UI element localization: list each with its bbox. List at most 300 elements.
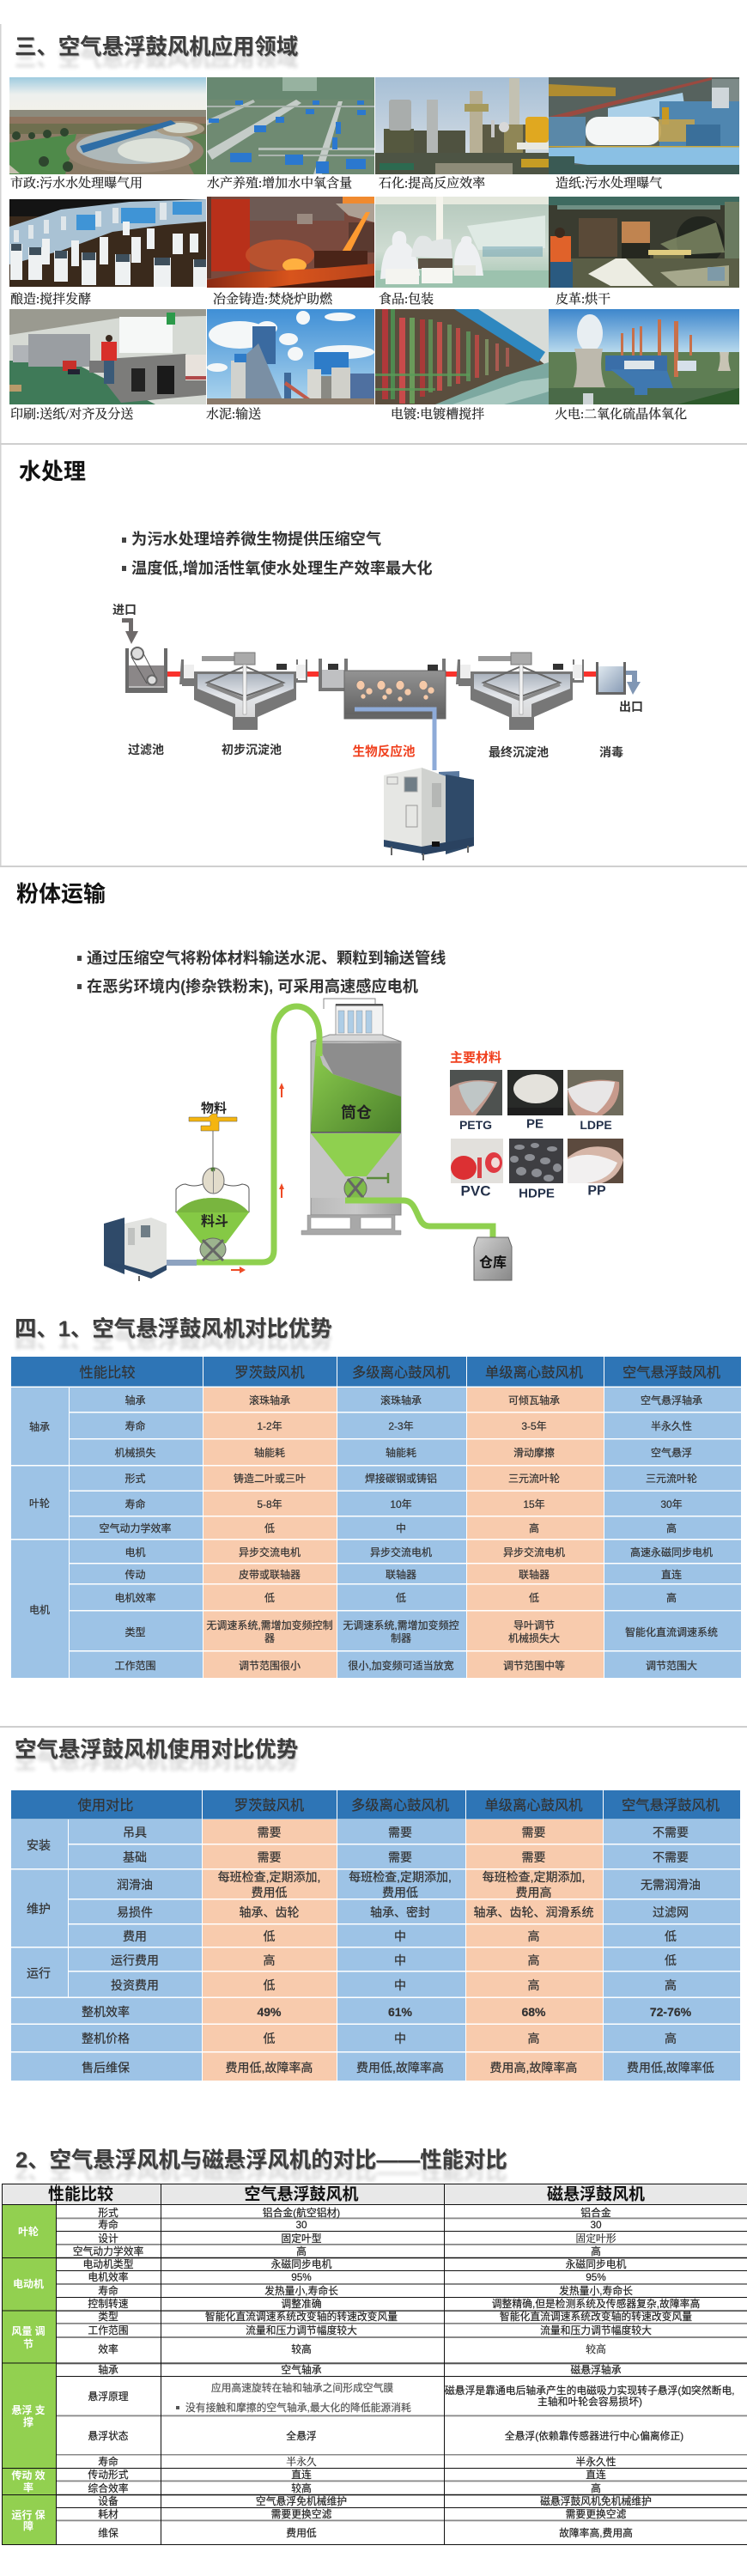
group labels — [29, 1420, 50, 1616]
rows: bearing: 轴能耗 — [254, 1446, 285, 1459]
rows: operation — [98, 2495, 652, 2539]
conveying diagram — [104, 999, 623, 1281]
rows: levitation support: 悬浮状态 — [88, 2430, 129, 2442]
table header: 单级离心鼓风机 — [485, 1798, 582, 1814]
rows: maintenance: 费用高 — [515, 1886, 551, 1899]
rows: impeller — [99, 1472, 697, 1534]
table backgrounds — [11, 1357, 741, 1678]
rows: motor: 调整精确,但是检测系统及传感器复杂,故障率高 — [492, 2298, 700, 2310]
rows: levitation support: 半永久性 — [575, 2456, 616, 2468]
rows: transmission: 传动形式 — [88, 2469, 129, 2481]
rows: operation: 高 — [263, 1953, 275, 1967]
rows: bearing: 1-2年 — [257, 1420, 282, 1432]
photo: electroplating — [375, 309, 549, 404]
rows: impeller: 中 — [396, 1522, 406, 1534]
rows: installation: 需要 — [388, 1850, 412, 1864]
rows: bearing: 寿命 — [125, 1419, 146, 1432]
text block: water treatment bullets: 温度低,增加活性氧使水处理生产效率最大化 — [131, 559, 433, 577]
rows: overall: 72-76% — [650, 2005, 692, 2019]
title: air vs magnetic: 2、空气悬浮风机与磁悬浮风机的对比——性能对比 — [15, 2148, 507, 2172]
rows: motor: 调节范围大 — [646, 1660, 697, 1672]
rows: impeller: 30 — [590, 2219, 602, 2231]
rows: levitation support — [88, 2364, 735, 2468]
rows: motor: 电机效率 — [88, 2271, 129, 2283]
text block: powder bullets: 通过压缩空气将粉体材料输送水泥、颗粒到输送管线 — [87, 949, 446, 967]
group labels: 撑 — [23, 2415, 33, 2428]
rows: operation: 故障率高,费用高 — [559, 2527, 633, 2539]
rows: levitation support: 主轴和叶轮会容易损坏) — [537, 2396, 642, 2408]
rows: bearing — [114, 1394, 702, 1459]
rows: installation: 需要 — [522, 1850, 546, 1864]
material: LDPE: LDPE — [580, 1118, 612, 1132]
rows: motor: 异步交流电机 — [239, 1546, 301, 1558]
silo — [301, 1035, 401, 1235]
rows: motor: 发热量小,寿命长 — [264, 2285, 338, 2297]
dust filter — [324, 999, 383, 1035]
rows: installation: 不需要 — [653, 1826, 689, 1839]
rows: motor: 低 — [264, 1592, 275, 1604]
labels: stages: 初步沉淀池 — [222, 743, 282, 756]
panel: air vs magnetic levitation table — [2, 2148, 747, 2545]
rows: maintenance — [117, 1870, 701, 1943]
rows: bearing: 滑动摩擦 — [513, 1446, 555, 1459]
rows: motor: 电机 — [125, 1546, 146, 1558]
group labels: 率 — [23, 2481, 33, 2494]
rows: air flow regulation: 智能化直流调速系统改变轴的转速改变风量 — [205, 2311, 398, 2323]
rows: impeller: 设计 — [98, 2233, 118, 2245]
rows: levitation support: 全悬浮(依赖靠传感器进行中心偏离修正) — [505, 2430, 683, 2442]
rows: air flow regulation: 流量和压力调节幅度较大 — [246, 2324, 357, 2336]
group labels: 叶轮 — [18, 2225, 39, 2238]
blower machine — [384, 768, 474, 860]
rows: air flow regulation: 较高 — [586, 2343, 606, 2355]
rows: air flow regulation: 流量和压力调节幅度较大 — [540, 2324, 652, 2336]
photo: thermal power — [549, 309, 739, 404]
rows: motor: 异步交流电机 — [503, 1546, 565, 1558]
rows: impeller: 高 — [296, 2245, 307, 2257]
rows: bearing: 空气悬浮 — [651, 1446, 692, 1459]
rows: overall: 整机价格 — [82, 2032, 130, 2045]
caption: municipal: 市政:污水水处理曝气用 — [10, 176, 143, 191]
material: HDPE — [509, 1139, 563, 1200]
rows: installation: 不需要 — [653, 1850, 689, 1864]
rows: bearing: 机械损失 — [114, 1446, 156, 1459]
group labels: 叶轮 — [29, 1498, 50, 1510]
material: LDPE — [568, 1070, 623, 1132]
rows: overall: 费用低,故障率低 — [627, 2061, 714, 2075]
rows: operation: 低 — [263, 1978, 275, 1992]
rows: motor — [82, 2258, 700, 2310]
rows: maintenance: 无需润滑油 — [641, 1878, 701, 1892]
tank: disinfection — [596, 662, 626, 695]
rows: motor: 高 — [666, 1591, 677, 1604]
table header: 空气悬浮鼓风机 — [622, 1798, 720, 1814]
rows: bearing: 滚珠轴承 — [380, 1394, 422, 1406]
rows: maintenance: 轴承、齿轮 — [239, 1905, 299, 1919]
rows: installation: 需要 — [388, 1826, 412, 1839]
caption: petrochemical: 石化:提高反应效率 — [379, 175, 485, 191]
arrow: outlet — [626, 671, 641, 695]
rows: maintenance: 易损件 — [117, 1905, 153, 1919]
rows: maintenance: 每班检查,定期添加, — [349, 1870, 452, 1884]
rows: installation: 需要 — [258, 1826, 282, 1839]
table header — [79, 1365, 720, 1381]
labels: stages: 最终沉淀池 — [489, 745, 549, 759]
rows: impeller: 30年 — [660, 1498, 683, 1510]
labels: stages: 生物反应池 — [353, 744, 416, 759]
rows: maintenance: 每班检查,定期添加, — [218, 1870, 320, 1884]
rows: installation: 基础 — [123, 1850, 147, 1864]
table header: 多级离心鼓风机 — [351, 1798, 449, 1814]
material: PP: PP — [587, 1183, 606, 1199]
table header: 罗茨鼓风机 — [234, 1365, 305, 1381]
hopper: 料斗 — [201, 1214, 228, 1230]
rows: motor — [114, 1546, 718, 1672]
rows: bearing: 2-3年 — [388, 1420, 414, 1432]
rows: operation: 需要更换空滤 — [566, 2508, 627, 2520]
rows: operation: 空气悬浮免机械维护 — [256, 2495, 347, 2507]
blower machine — [104, 1218, 167, 1281]
feeder — [189, 1101, 237, 1194]
labels: stages: 消毒 — [599, 745, 623, 759]
rows: motor: 器 — [264, 1632, 275, 1644]
rows: impeller: 高 — [591, 2245, 601, 2257]
rows: transmission — [88, 2469, 606, 2494]
rows: levitation support: 悬浮原理 — [88, 2391, 129, 2403]
labels: stages: 过滤池 — [128, 743, 164, 756]
group labels: 运行 — [27, 1966, 51, 1980]
rows: operation: 费用低 — [286, 2527, 317, 2539]
rows: installation — [123, 1826, 689, 1864]
rows: motor: 工作范围 — [114, 1660, 156, 1672]
red connectors — [167, 671, 596, 677]
rows: operation: 中 — [394, 1953, 406, 1967]
group labels: 运行 保 — [11, 2508, 46, 2521]
rows: impeller — [73, 2207, 616, 2257]
photo: municipal wastewater — [9, 77, 206, 174]
group labels: 传动 效 — [11, 2469, 46, 2482]
caption: electroplating: 电镀:电镀槽搅拌 — [391, 406, 484, 422]
title: comparison advantages: 四、1、空气悬浮鼓风机对比优势 — [15, 1317, 332, 1341]
rows: motor: 电机效率 — [114, 1591, 156, 1604]
rows: overall: 费用低,故障率高 — [226, 2061, 313, 2075]
tank: biological reactor — [319, 659, 446, 719]
caption: brewing: 酿造:搅拌发酵 — [10, 292, 91, 307]
rows: levitation support: 没有接触和摩擦的空气轴承,最大化的降低能源消耗 — [185, 2402, 411, 2414]
rows: maintenance: 每班检查,定期添加, — [483, 1870, 585, 1884]
rows: motor: 导叶调节 — [513, 1619, 555, 1631]
table header — [77, 1798, 720, 1814]
rows: overall: 68% — [521, 2005, 546, 2019]
label: silo: 筒仓 — [341, 1103, 372, 1121]
materials panel — [450, 1049, 623, 1200]
rows: overall: 高 — [527, 2032, 539, 2045]
rows: bearing: 空气悬浮轴承 — [641, 1394, 702, 1406]
heading: water treatment: 水处理 — [19, 459, 86, 484]
group labels: 轴承 — [29, 1420, 50, 1433]
rows: motor: 无调速系统,需增加变频控制 — [206, 1619, 333, 1631]
rows: overall: 费用低,故障率高 — [356, 2061, 444, 2075]
rows: maintenance: 低 — [665, 1929, 677, 1943]
page frame lines — [0, 24, 747, 1728]
caption: cement: 水泥:输送 — [206, 407, 261, 422]
material: PVC: PVC — [461, 1183, 490, 1199]
caption: metallurgy: 冶金铸造:焚烧炉助燃 — [213, 291, 333, 307]
rows: maintenance: 润滑油 — [117, 1878, 153, 1892]
title: usage advantages: 空气悬浮鼓风机使用对比优势 — [15, 1738, 298, 1762]
rows: maintenance: 费用低 — [251, 1886, 287, 1899]
photo: metallurgy — [207, 197, 374, 288]
rows: overall: 售后维保 — [82, 2061, 130, 2075]
rows: levitation support: 空气轴承 — [281, 2364, 322, 2376]
rows: transmission: 综合效率 — [88, 2482, 129, 2494]
rows: impeller: 15年 — [523, 1498, 545, 1510]
rows: impeller: 铝合金(航空铝材) — [263, 2207, 340, 2219]
materials panel: 主要材料 — [450, 1049, 501, 1065]
rows: impeller: 10年 — [390, 1498, 412, 1510]
rows: transmission: 高 — [591, 2482, 601, 2494]
photo: food packaging — [375, 197, 549, 288]
rows: levitation support: 半永久 — [286, 2456, 317, 2468]
table header: 罗茨鼓风机 — [234, 1798, 304, 1814]
material: PE: PE — [526, 1116, 544, 1132]
group labels — [11, 2225, 46, 2532]
table header: 磁悬浮鼓风机 — [547, 2184, 645, 2203]
rows: maintenance: 轴承、密封 — [370, 1905, 430, 1919]
label: outlet: 出口 — [619, 700, 643, 714]
text block: powder bullets — [77, 949, 446, 995]
rows: impeller: 铝合金 — [580, 2207, 611, 2219]
rows: installation: 需要 — [522, 1826, 546, 1839]
rows: transmission: 较高 — [291, 2482, 312, 2494]
rows: overall — [82, 2005, 714, 2075]
caption: aquaculture: 水产养殖:增加水中氧含量 — [207, 175, 352, 191]
rows: overall: 低 — [263, 2032, 275, 2045]
panel: usage comparison table — [11, 1738, 740, 2081]
heading: powder conveying: 粉体运输 — [16, 881, 106, 907]
rows: motor: 调节范围中等 — [503, 1659, 565, 1672]
rows: impeller: 空气动力学效率 — [99, 1522, 172, 1534]
rows: impeller: 寿命 — [125, 1498, 146, 1510]
rows: installation: 需要 — [258, 1850, 282, 1864]
tank: filter — [125, 647, 167, 693]
rows: air flow regulation: 类型 — [98, 2311, 118, 2323]
table header: 性能比较 — [48, 2184, 113, 2203]
text block: water treatment bullets: 为污水处理培养微生物提供压缩空气 — [131, 530, 381, 548]
title: application fields: 三、空气悬浮鼓风机应用领域 — [15, 34, 298, 59]
rows: operation: 耗材 — [98, 2508, 118, 2520]
group labels: 维护 — [27, 1902, 51, 1916]
rows: impeller: 固定叶形 — [575, 2233, 616, 2245]
rows: motor: 皮带或联轴器 — [239, 1568, 301, 1581]
rows: impeller: 高 — [529, 1522, 539, 1534]
rows: overall: 高 — [665, 2032, 677, 2045]
table header — [48, 2184, 645, 2203]
group labels: 障 — [23, 2519, 33, 2532]
rows: impeller: 固定叶型 — [281, 2233, 322, 2245]
labels: stages — [128, 743, 623, 759]
warehouse: 仓库 — [479, 1254, 507, 1271]
rows: operation: 维保 — [98, 2527, 118, 2539]
caption: thermal power: 火电:二氧化硫晶体氧化 — [555, 406, 687, 422]
rows: impeller: 形式 — [125, 1473, 146, 1485]
rows: motor: 智能化直流调速系统 — [625, 1625, 718, 1638]
table header: 空气悬浮鼓风机 — [622, 1365, 720, 1381]
rows: air flow regulation: 工作范围 — [88, 2324, 129, 2336]
rows: motor: 联轴器 — [386, 1568, 416, 1581]
rows: maintenance: 费用低 — [382, 1886, 418, 1899]
rows: operation: 设备 — [98, 2495, 118, 2507]
group labels: 安装 — [27, 1838, 51, 1852]
text block: water treatment bullets — [122, 530, 433, 577]
rows: bearing: 可倾瓦轴承 — [508, 1394, 560, 1406]
flow arrows — [231, 1083, 284, 1273]
table header: 多级离心鼓风机 — [352, 1365, 450, 1381]
rows: operation: 高 — [527, 1953, 539, 1967]
rows: motor: 调节范围很小 — [239, 1660, 301, 1672]
rows: levitation support: 轴承 — [98, 2364, 118, 2376]
rows: motor: 异步交流电机 — [370, 1546, 432, 1558]
table header: 使用对比 — [77, 1798, 134, 1814]
caption: food: 食品:包装 — [379, 292, 434, 307]
table frame — [2, 2184, 747, 2545]
grey air pipe — [167, 1260, 197, 1266]
rows: motor: 很小,加变频可适当放宽 — [348, 1659, 454, 1672]
arrow: inlet — [122, 618, 138, 644]
caption: leather: 皮革:烘干 — [556, 291, 610, 307]
rows: levitation support: 应用高速旋转在轴和轴承之间形成空气膜 — [211, 2382, 393, 2394]
rows: motor: 制器 — [391, 1632, 411, 1644]
rows: motor: 联轴器 — [519, 1568, 550, 1581]
rows: motor: 发热量小,寿命长 — [559, 2285, 633, 2297]
rows: installation: 吊具 — [123, 1826, 147, 1839]
rows: overall: 61% — [388, 2005, 413, 2019]
group labels: 风量 调 — [11, 2325, 46, 2337]
table header: 空气悬浮鼓风机 — [244, 2184, 359, 2203]
tank: primary clarifier — [179, 653, 307, 730]
process diagram: wastewater — [112, 603, 643, 860]
photo: brewing — [9, 199, 206, 287]
rows: air flow regulation: 效率 — [98, 2343, 118, 2355]
group labels: 节 — [23, 2337, 33, 2350]
rows: bearing: 轴承 — [125, 1394, 146, 1406]
rows: motor: 控制转速 — [88, 2298, 129, 2310]
rows: impeller: 5-8年 — [257, 1498, 282, 1510]
rows: operation: 运行费用 — [111, 1953, 159, 1967]
photo: printing — [9, 309, 206, 404]
photo: petrochemical — [375, 77, 549, 174]
rows: motor: 电动机类型 — [82, 2258, 134, 2270]
air pipe to reactor — [355, 709, 434, 770]
rows: operation: 磁悬浮鼓风机免机械维护 — [540, 2495, 652, 2507]
rows: overall: 49% — [257, 2005, 282, 2019]
photo: cement — [207, 309, 374, 404]
photo: paper making — [549, 77, 739, 174]
rows: maintenance: 中 — [394, 1929, 406, 1943]
rows: levitation support: 寿命 — [98, 2456, 118, 2468]
photo: leather — [549, 197, 739, 288]
rows: bearing: 3-5年 — [521, 1420, 547, 1432]
panel: powder conveying — [16, 881, 623, 1281]
hopper — [176, 1184, 249, 1261]
rows: levitation support: 磁悬浮轴承 — [570, 2364, 622, 2376]
rows: transmission: 直连 — [586, 2469, 606, 2481]
group labels: 电动机 — [13, 2277, 44, 2290]
rows: maintenance: 高 — [527, 1929, 539, 1943]
rows: motor: 永磁同步电机 — [271, 2258, 332, 2270]
rows: bearing: 滚珠轴承 — [249, 1394, 290, 1406]
rows: operation: 高 — [665, 1978, 677, 1992]
rows: motor: 高速永磁同步电机 — [630, 1546, 713, 1558]
table header: 性能比较 — [79, 1365, 136, 1381]
material: PETG: PETG — [459, 1118, 492, 1132]
rows: impeller: 寿命 — [98, 2219, 118, 2231]
rows: bearing: 半永久性 — [651, 1420, 692, 1432]
rows: motor: 传动 — [125, 1568, 146, 1581]
caption: paper: 造纸:污水处理曝气 — [556, 176, 662, 191]
rows: levitation support: 全悬浮 — [286, 2430, 317, 2442]
rows: operation: 投资费用 — [111, 1978, 159, 1992]
material: PP — [568, 1139, 623, 1199]
rows: impeller: 三元流叶轮 — [508, 1473, 560, 1485]
rows: maintenance: 费用 — [123, 1929, 147, 1943]
rows: motor: 95% — [586, 2271, 606, 2283]
rows: operation — [111, 1953, 677, 1992]
rows: motor: 95% — [291, 2271, 312, 2283]
rows: overall: 整机效率 — [82, 2005, 130, 2019]
rows: operation: 中 — [394, 1978, 406, 1992]
tank: final clarifier — [456, 653, 584, 730]
rows: motor: 寿命 — [98, 2285, 118, 2297]
warehouse — [474, 1237, 512, 1280]
rows: motor: 调整准确 — [281, 2298, 322, 2310]
table backgrounds — [11, 1790, 740, 2081]
rows: air flow regulation: 智能化直流调速系统改变轴的转速改变风量 — [500, 2311, 692, 2323]
rows: motor: 类型 — [125, 1626, 146, 1638]
rows: transmission: 直连 — [291, 2469, 312, 2481]
rows: impeller: 三元流叶轮 — [646, 1473, 697, 1485]
rows: impeller: 高 — [666, 1522, 677, 1534]
rows: impeller: 30 — [295, 2219, 307, 2231]
rows: motor: 低 — [529, 1592, 539, 1604]
rows: maintenance: 过滤网 — [653, 1905, 689, 1919]
rows: bearing: 轴能耗 — [386, 1446, 416, 1459]
group labels — [27, 1838, 51, 1980]
material: PETG — [450, 1070, 502, 1132]
photo: aquaculture — [207, 77, 374, 174]
panel: performance comparison table — [11, 1317, 741, 1678]
rows: motor: 机械损失大 — [508, 1631, 560, 1644]
rows: impeller: 形式 — [98, 2207, 118, 2219]
feeder: 物料 — [201, 1101, 227, 1116]
rows: motor: 低 — [396, 1592, 406, 1604]
label: inlet: 进口 — [112, 603, 137, 617]
rows: overall: 费用高,故障率高 — [490, 2061, 577, 2075]
pipe to warehouse — [345, 1200, 493, 1238]
rows: air flow regulation — [88, 2311, 692, 2355]
group labels: 悬浮 支 — [11, 2403, 46, 2416]
rows: motor: 直连 — [661, 1568, 682, 1581]
rows: overall: 中 — [394, 2032, 406, 2045]
rows: impeller: 空气动力学效率 — [73, 2245, 143, 2257]
panel: water treatment — [19, 459, 643, 860]
material: HDPE: HDPE — [519, 1187, 555, 1200]
rows: impeller: 焊接碳钢或铸铝 — [365, 1472, 437, 1485]
rows: operation: 低 — [665, 1953, 677, 1967]
text block: powder bullets: 在恶劣环境内(掺杂铁粉末), 可采用高速感应电机 — [87, 977, 418, 995]
rows: operation: 需要更换空滤 — [271, 2508, 332, 2520]
table header: 单级离心鼓风机 — [485, 1365, 583, 1381]
